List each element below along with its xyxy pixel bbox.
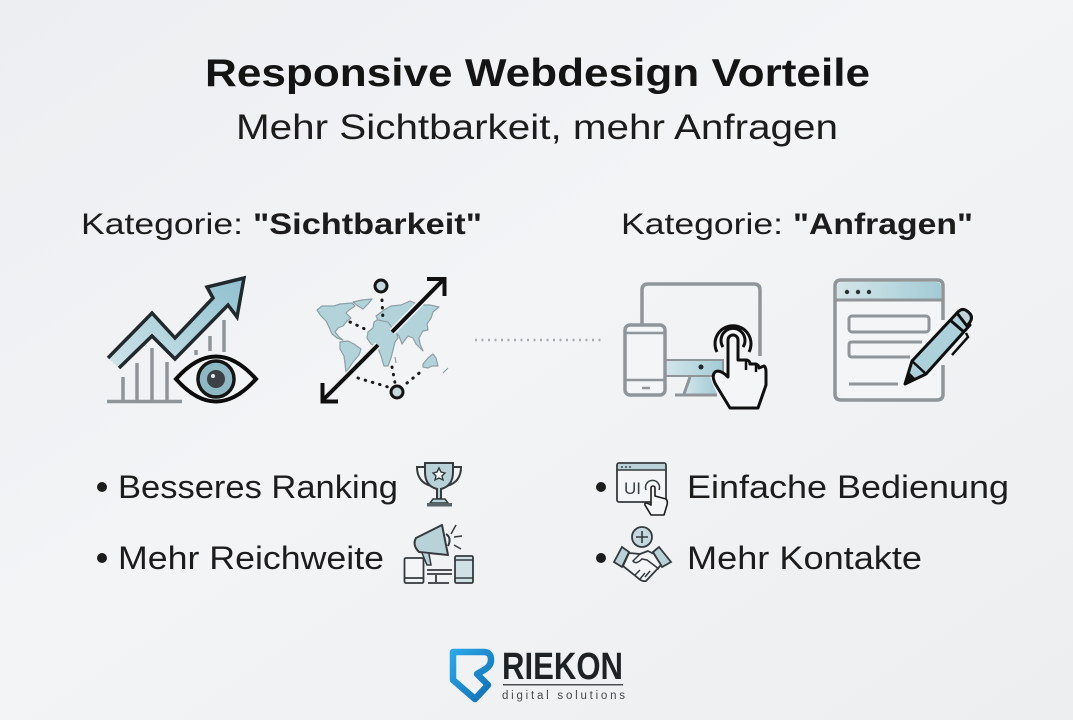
- icon: UI window with hand: [617, 463, 667, 515]
- icon: trophy: [417, 463, 461, 506]
- icon: web form with pen: [835, 280, 971, 400]
- icon: handshake with plus: [614, 527, 671, 581]
- icon: growth chart with eye: [107, 278, 256, 402]
- icon: UI window with hand: UI: [624, 479, 641, 498]
- icon: megaphone with devices: [404, 525, 473, 583]
- heading: Sichtbarkeit: [81, 208, 482, 241]
- bullet: Mehr Kontakte: [596, 540, 922, 576]
- heading: Anfragen: "Anfragen": [793, 208, 973, 241]
- logo mark: [453, 652, 491, 699]
- bullet: Besseres Ranking: Besseres Ranking: [118, 469, 398, 505]
- bullet: Mehr Kontakte: Mehr Kontakte: [687, 540, 922, 576]
- heading: Anfragen: Kategorie:: [621, 208, 783, 241]
- dotted connector: [475, 339, 601, 341]
- heading: Sichtbarkeit: "Sichtbarkeit": [253, 208, 482, 241]
- icon: world map with arrows: [317, 279, 448, 402]
- bullet: Einfache Bedienung: [596, 469, 1009, 505]
- logo: Riekon: [453, 646, 625, 702]
- bullet: Einfache Bedienung: Einfache Bedienung: [687, 469, 1009, 505]
- icon: responsive devices with touch hand: [625, 284, 766, 408]
- heading: Sichtbarkeit: Kategorie:: [81, 208, 243, 241]
- logo tagline: digital solutions: [502, 690, 625, 702]
- subtitle: Mehr Sichtbarkeit, mehr Anfragen: [236, 108, 838, 147]
- bullet: Mehr Reichweite: Mehr Reichweite: [118, 540, 384, 576]
- logo wordmark: RIEKON: [502, 646, 623, 688]
- title: Responsive Webdesign Vorteile: [205, 52, 870, 95]
- heading: Anfragen: [621, 208, 973, 241]
